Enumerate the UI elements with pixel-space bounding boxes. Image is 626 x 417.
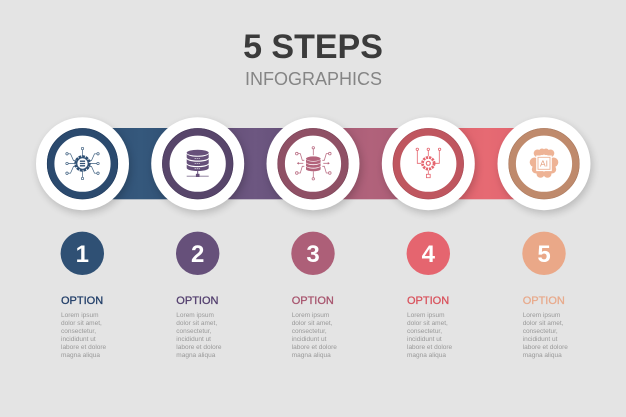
option 1 text: [61, 295, 107, 359]
icon: AI chip brain: AI: [540, 159, 548, 169]
option 4 text: OPTION: [407, 295, 449, 307]
option 5 text: incididunt ut: [523, 336, 558, 343]
title: 5 STEPS: [243, 28, 383, 66]
step 2: [151, 117, 246, 359]
step 3: [266, 117, 362, 359]
option 1 text: dolor sit amet,: [61, 320, 102, 327]
icon: gear with document and circuit nodes: [66, 147, 99, 180]
step 5: [498, 117, 592, 359]
option 5 text: dolor sit amet,: [523, 320, 564, 327]
option 5 text: labore et dolore: [523, 344, 568, 351]
option 4 text: labore et dolore: [407, 344, 453, 351]
badge 3: [266, 117, 362, 214]
option 2 text: magna aliqua: [176, 352, 216, 359]
option 3 text: consectetur,: [292, 328, 327, 335]
option 4 text: dolor sit amet,: [407, 320, 448, 327]
option 4 text: Lorem ipsum: [407, 312, 445, 319]
number 5: [522, 232, 566, 275]
number 4: [407, 232, 450, 275]
icon: gear with branching nodes: [416, 148, 441, 178]
number 1: [61, 232, 104, 275]
option 4 text: incididunt ut: [407, 336, 442, 343]
connecting ribbon: [82, 128, 544, 199]
badge 1: [36, 117, 130, 214]
option 4 text: consectetur,: [407, 328, 442, 335]
option 5 text: OPTION: [523, 295, 565, 307]
option 2 text: OPTION: [176, 295, 219, 307]
option 3 text: OPTION: [292, 295, 334, 307]
option 2 text: [176, 295, 222, 359]
icon: database with circuit nodes: [296, 147, 331, 180]
badge 4: [382, 117, 476, 214]
option 2 text: incididunt ut: [176, 336, 211, 343]
step 4: [382, 117, 476, 359]
badge 5: [498, 117, 592, 214]
option 3 text: dolor sit amet,: [292, 320, 333, 327]
number 4: 4: [422, 241, 436, 268]
number 2: [176, 232, 219, 275]
number 2: 2: [191, 241, 204, 268]
option 5 text: Lorem ipsum: [523, 312, 560, 319]
option 3 text: Lorem ipsum: [292, 312, 329, 319]
badge 2: [151, 117, 246, 214]
option 2 text: dolor sit amet,: [176, 320, 217, 327]
icon: AI chip brain: [530, 148, 558, 178]
option 1 text: Lorem ipsum: [61, 312, 99, 319]
option 1 text: consectetur,: [61, 328, 96, 335]
step 1: [36, 117, 130, 359]
number 3: [291, 232, 335, 275]
option 4 text: [407, 295, 453, 359]
option 5 text: [523, 295, 568, 359]
option 4 text: magna aliqua: [407, 352, 446, 359]
number 5: 5: [537, 241, 551, 268]
number 3: 3: [306, 241, 320, 268]
option 1 text: OPTION: [61, 295, 103, 307]
option 3 text: labore et dolore: [292, 344, 337, 351]
option 3 text: [292, 295, 337, 359]
option 1 text: magna aliqua: [61, 352, 100, 359]
option 2 text: consectetur,: [176, 328, 212, 335]
option 2 text: labore et dolore: [176, 344, 222, 351]
icon: database server: [187, 150, 209, 177]
subtitle: INFOGRAPHICS: [245, 69, 382, 89]
option 5 text: magna aliqua: [523, 352, 562, 359]
option 3 text: incididunt ut: [292, 336, 327, 343]
option 1 text: labore et dolore: [61, 344, 107, 351]
number 1: 1: [76, 241, 89, 268]
option 5 text: consectetur,: [523, 328, 558, 335]
option 1 text: incididunt ut: [61, 336, 96, 343]
option 3 text: magna aliqua: [292, 352, 331, 359]
option 2 text: Lorem ipsum: [176, 312, 214, 319]
